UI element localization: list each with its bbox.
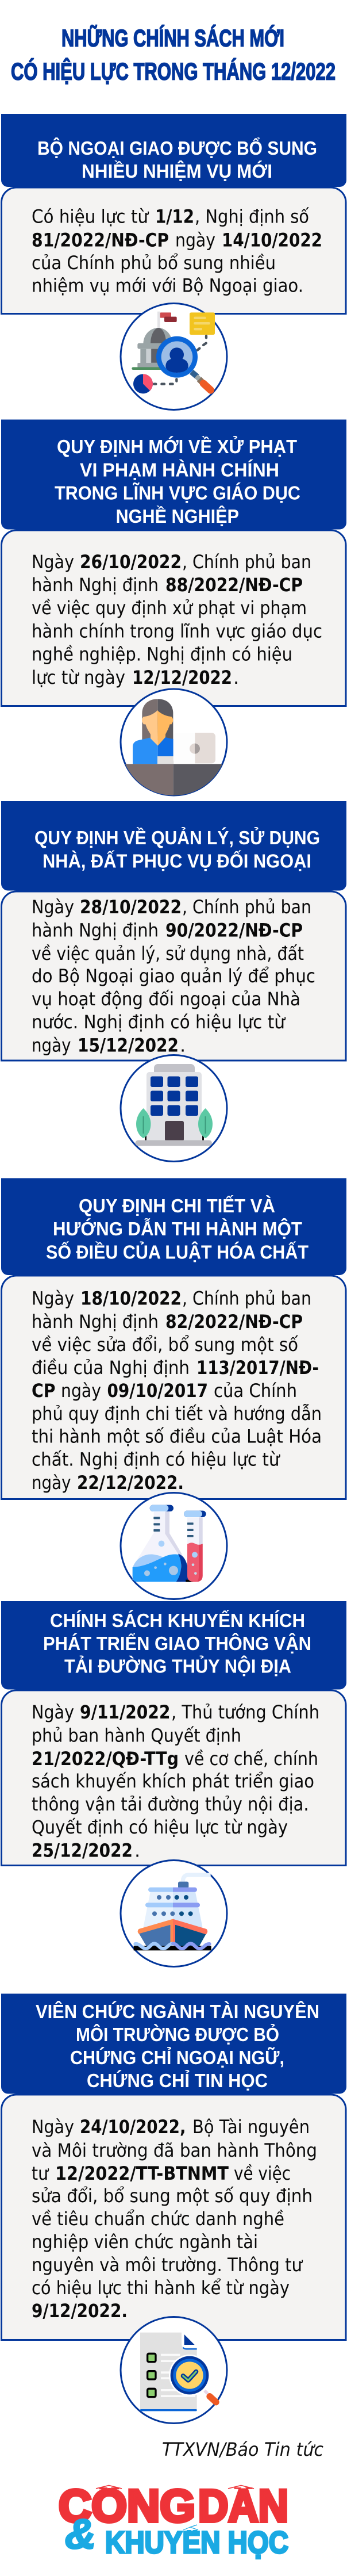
- body text: , Chính phủ ban: [182, 551, 311, 573]
- body text: , Thủ tướng Chính: [171, 1701, 319, 1723]
- body text: chất. Nghị định có hiệu lực từ: [32, 1448, 280, 1470]
- body text: về việc: [234, 2162, 291, 2184]
- logo: Công Dân & Khuyến Học: KHUYẾN HỌC: [105, 2525, 288, 2560]
- body box: [1, 1276, 346, 1499]
- logo: Công Dân & Khuyến Học: [59, 2480, 288, 2560]
- body text: 24/10/2022,: [80, 2116, 186, 2138]
- header bar: [1, 1178, 346, 1275]
- body text: 12/2022/TT-BTNMT: [55, 2162, 229, 2184]
- body text: 9/12/2022.: [32, 2300, 128, 2322]
- header bar: [1, 1601, 346, 1690]
- body text: .: [180, 1034, 186, 1056]
- body text: nguyên và môi trường. Thông tư: [32, 2254, 303, 2276]
- heading: [34, 827, 320, 872]
- heading: CHỨNG CHỈ NGOẠI NGỮ,: [70, 2047, 284, 2068]
- body text: hành Nghị định: [32, 919, 159, 941]
- body text: ngày: [175, 229, 215, 251]
- body text: của Chính phủ bổ sung nhiều: [32, 252, 276, 274]
- icon: woman at laptop: [121, 689, 227, 797]
- body text: Ngày: [32, 2116, 74, 2138]
- icon: ship: [121, 1860, 227, 1967]
- body text: Ngày: [32, 896, 74, 918]
- body text: 22/12/2022.: [77, 1472, 184, 1494]
- body text: 18/10/2022: [80, 1287, 182, 1309]
- heading: NGHỀ NGHIỆP: [116, 506, 239, 527]
- body text: phủ quy định chi tiết và hướng dẫn: [32, 1403, 322, 1425]
- heading: CHỨNG CHỈ TIN HỌC: [87, 2070, 268, 2091]
- heading: TRONG LĨNH VỰC GIÁO DỤC: [55, 482, 300, 504]
- body text: 88/2022/NĐ-CP: [165, 574, 303, 596]
- body text: ngày: [61, 1380, 101, 1402]
- body text: nghiệp viên chức ngành tài: [32, 2231, 258, 2253]
- body text: sách khuyến khích phát triển giao: [32, 1770, 314, 1792]
- panel: Bộ Ngoại giao: [1, 114, 346, 409]
- body text: hành chính trong lĩnh vực giáo dục: [32, 620, 322, 642]
- body text: 81/2022/NĐ-CP: [32, 229, 169, 251]
- body text: của Chính: [214, 1380, 297, 1402]
- body text: 12/12/2022: [132, 667, 232, 688]
- heading: VIÊN CHỨC NGÀNH TÀI NGUYÊN: [36, 2001, 319, 2022]
- body box: [1, 2095, 346, 2340]
- body text: do Bộ Ngoại giao quản lý để phục: [32, 965, 315, 987]
- panel: Luật Hóa chất: [1, 1178, 346, 1599]
- heading: [46, 1195, 309, 1263]
- body text: nhiệm vụ mới với Bộ Ngoại giao.: [32, 275, 303, 297]
- header bar: [1, 420, 346, 529]
- body text: CP: [32, 1380, 55, 1402]
- body text: 14/10/2022: [222, 229, 322, 251]
- source credit: TTXVN/Báo Tin tức: [162, 2439, 323, 2460]
- heading: [36, 2001, 319, 2091]
- body text: ngày: [32, 1034, 71, 1056]
- heading: NHÀ, ĐẤT PHỤC VỤ ĐỐI NGOẠI: [43, 850, 311, 872]
- heading: SỐ ĐIỀU CỦA LUẬT HÓA CHẤT: [46, 1241, 309, 1263]
- body text: về tiêu chuẩn chức danh nghề: [32, 2208, 284, 2230]
- panel: giao thông vận tải đường thủy: [1, 1601, 346, 1967]
- body text: phủ ban hành Quyết định: [32, 1724, 241, 1746]
- body text: 25/12/2022: [32, 1839, 133, 1861]
- body text: nghề nghiệp. Nghị định có hiệu: [32, 643, 292, 665]
- heading: [43, 1610, 311, 1677]
- body text: về việc quy định xử phạt vi phạm: [32, 597, 307, 619]
- body text: 82/2022/NĐ-CP: [165, 1311, 303, 1333]
- icon: chemistry flask and test tube: [121, 1493, 227, 1599]
- body text: , Chính phủ ban: [182, 1287, 311, 1309]
- body text: Có hiệu lực từ: [32, 206, 149, 228]
- heading: MÔI TRƯỜNG ĐƯỢC BỎ: [76, 2023, 279, 2045]
- body text: Ngày: [32, 1287, 74, 1309]
- body text: Bộ Tài nguyên: [192, 2116, 310, 2138]
- body text: 113/2017/NĐ-: [196, 1357, 319, 1379]
- heading: HƯỚNG DẪN THI HÀNH MỘT: [53, 1218, 302, 1239]
- body text: Quyết định có hiệu lực từ ngày: [32, 1816, 288, 1838]
- body text: tư: [32, 2162, 49, 2184]
- body text: hành Nghị định: [32, 1311, 159, 1333]
- body text: 90/2022/NĐ-CP: [165, 919, 303, 941]
- heading: PHÁT TRIỂN GIAO THÔNG VẬN: [43, 1632, 311, 1654]
- body text: thi hành một số điều của Luật Hóa: [32, 1425, 322, 1447]
- body text: sửa đổi, bổ sung một số quy định: [32, 2185, 313, 2207]
- icon: government building under magnifier: [121, 304, 227, 409]
- heading: CHÍNH SÁCH KHUYẾN KHÍCH: [50, 1610, 305, 1631]
- heading: QUY ĐỊNH MỚI VỀ XỬ PHẠT: [57, 436, 297, 457]
- body text: 21/2022/QĐ-TTg: [32, 1748, 179, 1770]
- body text: có hiệu lực thi hành kể từ ngày: [32, 2277, 290, 2299]
- body text: và Môi trường đã ban hành Thông: [32, 2139, 317, 2161]
- body text: .: [134, 1839, 140, 1861]
- heading: TẢI ĐƯỜNG THỦY NỘI ĐỊA: [64, 1655, 291, 1677]
- heading: QUY ĐỊNH CHI TIẾT VÀ: [79, 1195, 275, 1216]
- body text: , Chính phủ ban: [182, 896, 311, 918]
- logo: Công Dân & Khuyến Học: DÂN: [198, 2480, 288, 2531]
- icon: office building: [121, 1055, 227, 1162]
- body text: lực từ ngày: [32, 667, 125, 688]
- body text: , Nghị định số: [195, 206, 309, 228]
- body text: 1/12: [155, 206, 194, 228]
- body box: [1, 530, 346, 706]
- header bar: [1, 114, 346, 187]
- body text: hành Nghị định: [32, 574, 159, 596]
- body text: về cơ chế, chính: [184, 1748, 318, 1770]
- body text: vụ hoạt động đối ngoại của Nhà: [32, 988, 300, 1010]
- heading: [37, 137, 317, 182]
- panel: nhà đất phục vụ đối ngoại: [1, 801, 346, 1162]
- body box: [1, 187, 346, 314]
- body box: [1, 1690, 346, 1866]
- body text: 9/11/2022: [80, 1701, 170, 1723]
- body text: về việc quản lý, sử dụng nhà, đất: [32, 943, 304, 964]
- body text: về việc sửa đổi, bổ sung một số: [32, 1334, 298, 1356]
- body text: thông vận tải đường thủy nội địa.: [32, 1793, 309, 1815]
- logo: Công Dân & Khuyến Học: CÔNG: [59, 2480, 195, 2531]
- logo: Công Dân & Khuyến Học: &: [65, 2512, 96, 2558]
- body text: điều của Nghị định: [32, 1357, 190, 1379]
- body text: 09/10/2017: [107, 1380, 208, 1402]
- body text: Ngày: [32, 1701, 74, 1723]
- heading: VI PHẠM HÀNH CHÍNH: [80, 459, 279, 481]
- body text: 28/10/2022: [80, 896, 182, 918]
- body text: Ngày: [32, 551, 74, 573]
- heading: BỘ NGOẠI GIAO ĐƯỢC BỔ SUNG: [37, 137, 317, 159]
- heading: [55, 436, 300, 527]
- body text: 26/10/2022: [80, 551, 182, 573]
- icon: checklist document with magnifier: [121, 2317, 227, 2424]
- header bar: [1, 1993, 346, 2093]
- body text: .: [233, 667, 239, 688]
- heading: QUY ĐỊNH VỀ QUẢN LÝ, SỬ DỤNG: [34, 827, 320, 848]
- panel: viên chức tài nguyên môi trường: [1, 1993, 346, 2424]
- body box: [1, 891, 346, 1061]
- panel: xử phạt vi phạm hành chính: [1, 420, 346, 797]
- header bar: [1, 801, 346, 890]
- body text: ngày: [32, 1472, 71, 1494]
- heading: NHIỀU NHIỆM VỤ MỚI: [82, 160, 272, 182]
- title: [11, 24, 336, 85]
- body text: nước. Nghị định có hiệu lực từ: [32, 1011, 286, 1033]
- body text: 15/12/2022: [78, 1034, 179, 1056]
